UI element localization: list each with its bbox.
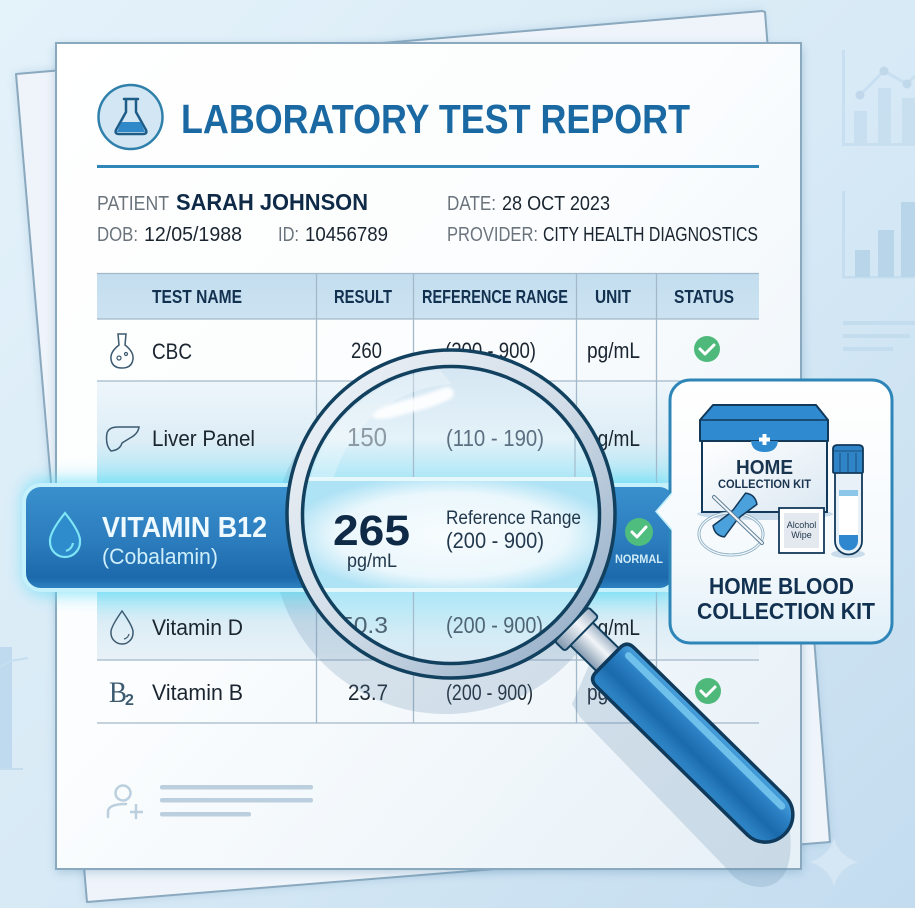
row: CBC: CBC (152, 339, 192, 364)
icon: droplet (50, 513, 80, 557)
row: vitamin B: Vitamin B (152, 680, 243, 705)
lens reading: reference range (446, 508, 581, 553)
row: CBC: (200 - 900) (445, 338, 536, 363)
icon: butterfly needle (699, 491, 763, 555)
row: liver panel (106, 426, 640, 451)
table grid (97, 273, 759, 723)
magnifier handle (553, 605, 804, 853)
table header: UNIT (595, 286, 632, 307)
patient details: DOB: (97, 224, 138, 246)
highlighted row: vitamin B12 (24, 485, 676, 590)
highlight band glow (24, 480, 672, 594)
table header: TEST NAME (152, 286, 242, 307)
row: CBC (111, 334, 720, 368)
background chart: line and bars (842, 50, 915, 146)
sparkle (810, 838, 858, 886)
row: vitamin B: B (109, 676, 127, 709)
icon: blood collection tube (831, 445, 865, 558)
report details (447, 193, 758, 246)
patient details (97, 189, 388, 246)
table header: RESULT (334, 286, 393, 307)
row: vitamin B: (200 - 900) (446, 680, 533, 705)
row: vitamin B: 23.7 (348, 680, 388, 705)
lens row: vitamin D values (346, 616, 542, 638)
patient details: PATIENT (97, 193, 169, 215)
lens reading: result: 265 (333, 507, 410, 555)
icon: kit box (700, 405, 828, 512)
row: CBC: 260 (351, 338, 382, 363)
table (97, 273, 759, 723)
icon: alcohol wipe: Alcohol (787, 520, 816, 530)
icon: kit box: HOME (736, 457, 793, 479)
lens row: liver values: (110 - 190) (446, 425, 544, 451)
row: vitamin D: Vitamin D (152, 615, 243, 640)
row: vitamin D: pg/mL (587, 615, 640, 640)
title rule (97, 165, 759, 168)
main report sheet (56, 43, 802, 872)
patient details: 10456789 (305, 224, 388, 246)
row: liver panel: pg/mL (587, 426, 640, 451)
lens reading: reference range: Reference Range (446, 508, 581, 529)
lens row: liver values (348, 428, 543, 451)
row: liver panel: Liver Panel (152, 426, 255, 451)
icon: flask badge (98, 85, 162, 149)
icon: alcohol wipe: Wipe (791, 530, 812, 540)
report details: PROVIDER: (447, 224, 538, 246)
background text lines (843, 321, 915, 351)
lens reading: result: pg/mL (347, 551, 397, 572)
magnifier lens (287, 350, 615, 678)
status: normal: NORMAL (615, 552, 663, 566)
status: normal (615, 518, 663, 566)
row: CBC: pg/mL (587, 338, 640, 363)
footer signature (108, 785, 313, 819)
table header (97, 273, 759, 319)
patient details: 12/05/1988 (144, 224, 242, 246)
lens row: vitamin D values: 50.3 (340, 612, 388, 638)
lens reading: result (334, 515, 409, 571)
title: LABORATORY TEST REPORT (181, 96, 690, 142)
background chart: left partial (0, 647, 28, 770)
background chart: bars (842, 191, 915, 278)
highlighted row: vitamin B12: VITAMIN B12 (102, 512, 267, 544)
callout: home blood collection kit: HOME BLOOD (709, 573, 854, 599)
row: vitamin D (111, 611, 640, 644)
icon: kit box: COLLECTION KIT (718, 479, 811, 491)
report details: CITY HEALTH DIAGNOSTICS (543, 224, 758, 246)
patient details: SARAH JOHNSON (176, 189, 368, 215)
report details: DATE: (447, 193, 496, 215)
report details: 28 OCT 2023 (502, 193, 610, 215)
patient details: ID: (278, 224, 299, 246)
icon: alcohol wipe (779, 508, 824, 553)
table header: STATUS (674, 286, 734, 307)
row: vitamin B (109, 676, 721, 709)
callout: home blood collection kit: COLLECTION KIT (697, 598, 875, 624)
magnifier shadow (272, 368, 791, 887)
lens row: liver values: 150 (347, 422, 387, 452)
row: vitamin B: 2 (125, 692, 134, 709)
callout: home blood collection kit (656, 380, 892, 643)
lens reading: reference range: (200 - 900) (446, 528, 544, 553)
highlighted row: vitamin B12: (Cobalamin) (102, 544, 218, 569)
row: vitamin B: pg/mL (587, 680, 640, 705)
lens row: vitamin D values: (200 - 900) (446, 612, 543, 638)
row shading (97, 381, 759, 660)
table header: REFERENCE RANGE (422, 286, 568, 307)
